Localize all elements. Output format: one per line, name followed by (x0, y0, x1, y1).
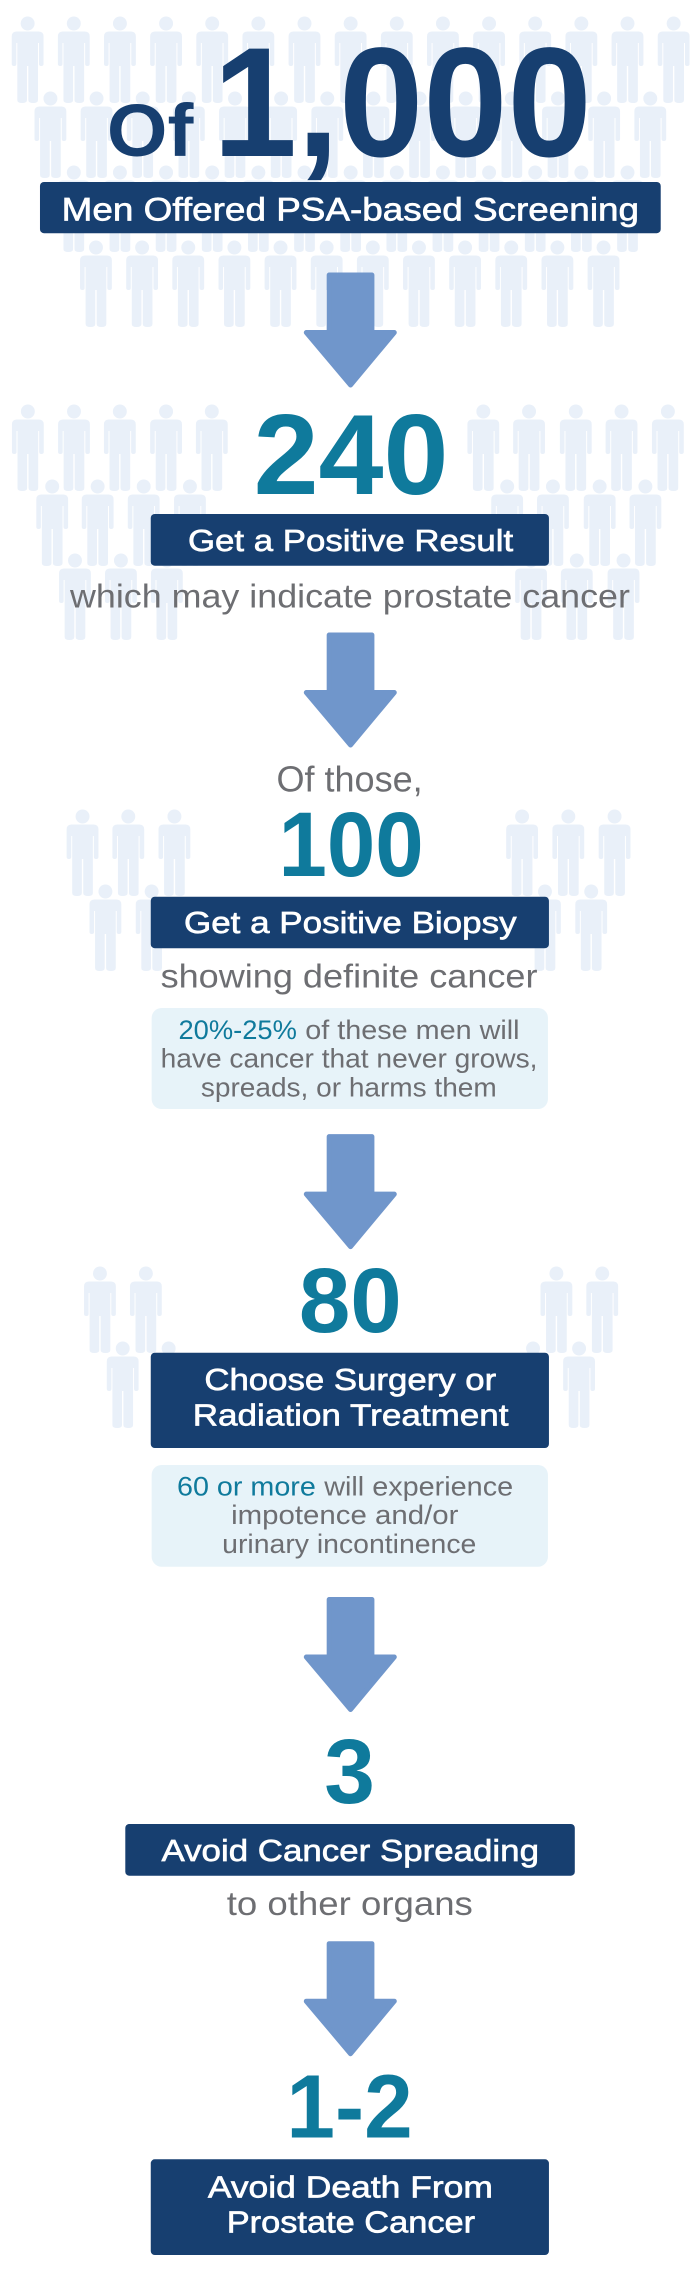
callout: 60 or more will experience: impotence and/or (231, 1500, 458, 1530)
crowd: 240 men (12, 404, 684, 640)
banner: Choose Surgery or Radiation Treatment: Choose Surgery or (204, 1362, 496, 1397)
banner: Get a Positive Biopsy: Get a Positive Biopsy (184, 905, 517, 940)
banner: Men Offered PSA-based Screening (40, 182, 661, 233)
banner: Avoid Death From Prostate Cancer: Avoid Death From (208, 2169, 493, 2205)
callout: 20%-25% of these men: have cancer that never grows, (161, 1044, 538, 1074)
arrow: down to 80 (306, 1137, 394, 1247)
banner: Avoid Cancer Spreading (125, 1824, 575, 1876)
callout: 60 or more will experience: 60 or more (177, 1472, 316, 1502)
banner: Choose Surgery or Radiation Treatment: Radiation Treatment (193, 1398, 509, 1433)
banner: Avoid Death From Prostate Cancer: Prostate Cancer (227, 2204, 475, 2239)
number: 80: 80 (299, 1250, 402, 1352)
callout: 60 or more will experience: will experience (323, 1472, 513, 1502)
caption: Of those,: Of those, (276, 759, 423, 800)
crowd: 1,000 men (12, 16, 690, 327)
arrow: down to 1-2 (306, 1944, 394, 2054)
callout: 60 or more will experience: urinary incontinence (222, 1529, 476, 1559)
caption: which may indicate prostate cancer: which may indicate prostate cancer (69, 577, 630, 615)
callout: 20%-25% of these men: of these men will (305, 1015, 520, 1045)
number: 3: 3 (324, 1721, 375, 1823)
banner: Get a Positive Result (151, 514, 549, 566)
banner: Men Offered PSA-based Screening: Men Offered PSA-based Screening (62, 191, 639, 228)
crowd: 80 men (84, 1266, 618, 1428)
banner: Choose Surgery or Radiation Treatment (151, 1353, 549, 1448)
callout: 60 or more will experience (152, 1465, 548, 1567)
number: 1-2: 1-2 (286, 2057, 413, 2158)
callout: 20%-25% of these men: spreads, or harms them (201, 1073, 497, 1103)
banner: Get a Positive Biopsy (151, 897, 549, 948)
number: 240: 240 (254, 392, 449, 519)
crowd: 100 men (67, 810, 630, 971)
callout: 20%-25% of these men: 20%-25% (179, 1015, 297, 1045)
caption: to other organs: to other organs (227, 1885, 473, 1922)
arrow: down to 100 (306, 635, 394, 745)
number: 100: 100 (278, 794, 424, 896)
arrow: down to 240 (306, 275, 394, 385)
title number: Of 1,000: 1,000 (213, 15, 592, 189)
title number: Of 1,000: Of (107, 89, 194, 172)
banner: Avoid Cancer Spreading: Avoid Cancer Spreading (162, 1833, 539, 1868)
arrow: down to 3 (306, 1600, 394, 1710)
banner: Get a Positive Result: Get a Positive Result (188, 523, 514, 558)
caption: showing definite cancer: showing definite cancer (161, 957, 538, 995)
callout: 20%-25% of these men (152, 1008, 548, 1109)
banner: Avoid Death From Prostate Cancer (151, 2159, 549, 2255)
